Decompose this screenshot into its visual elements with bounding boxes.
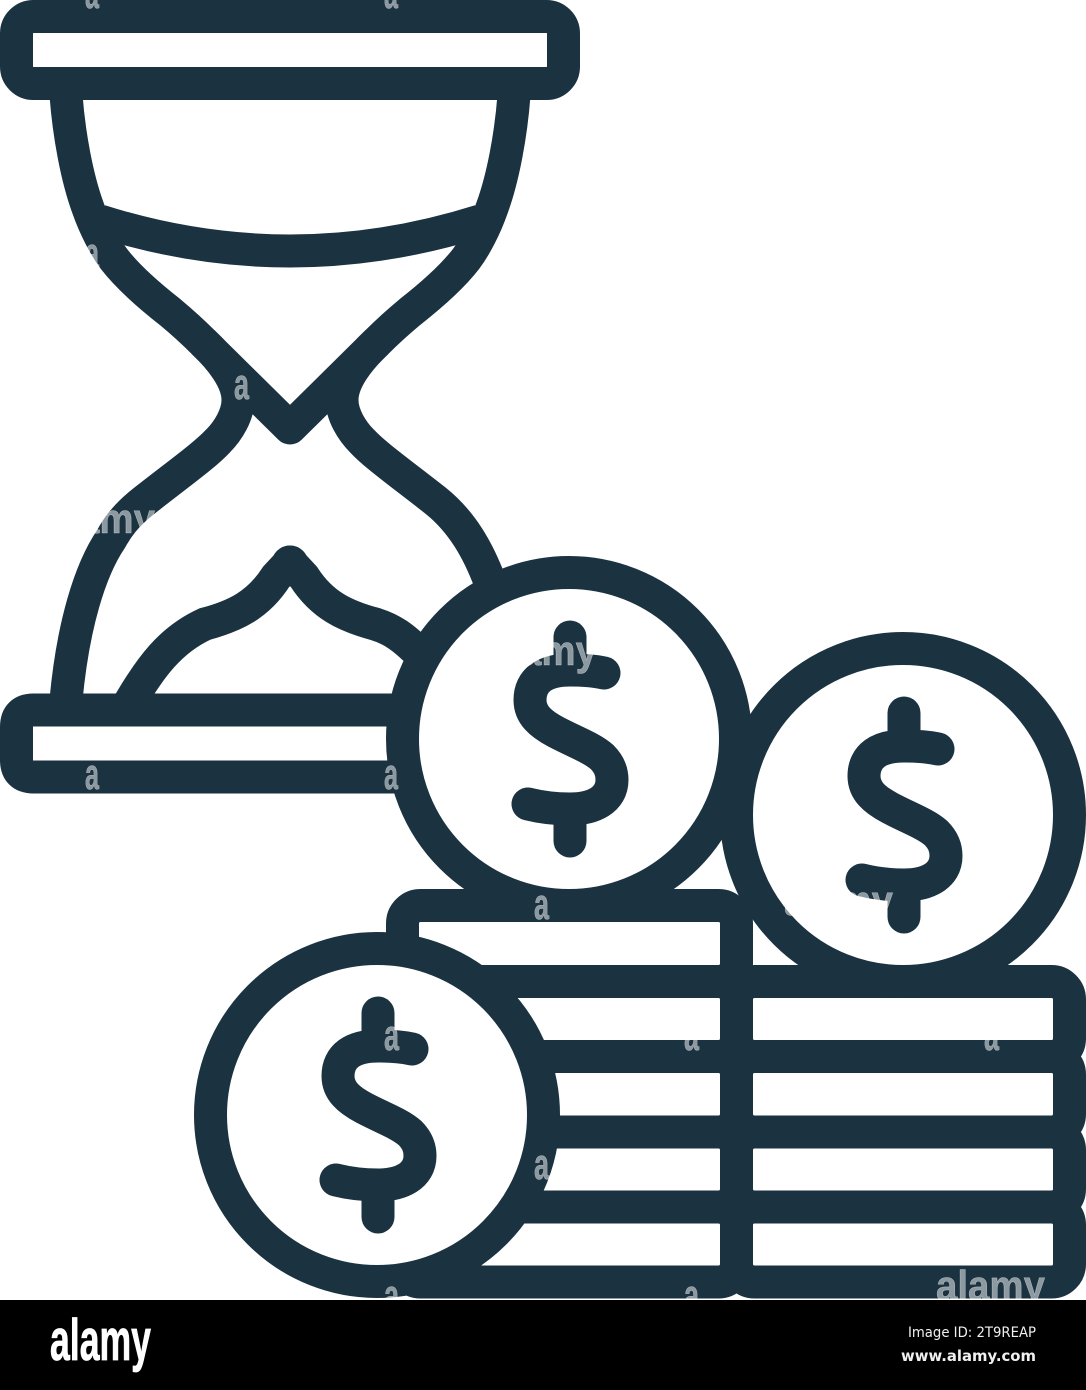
icon: hourglass (16, 16, 564, 777)
neck, left side (66, 342, 238, 700)
watermark fragments: alamy (936, 1262, 1046, 1309)
website: www.alamy.com (901, 1347, 1036, 1365)
mound peak (288, 562, 292, 566)
watermark fragments: a (534, 1140, 549, 1189)
watermark fragments: a (684, 1271, 699, 1320)
hourglass top cap (16, 16, 564, 84)
upper sand surface (100, 221, 480, 251)
footer logo: alamy (50, 1308, 151, 1373)
lower sand mound (130, 562, 418, 702)
watermark fragments: a (684, 1011, 699, 1060)
watermark fragments: alamy (784, 877, 894, 924)
watermark fragments: a (534, 880, 549, 929)
icon: right coin (736, 648, 1070, 982)
watermark fragments: alamy (488, 627, 598, 674)
watermark fragments: a (85, 229, 99, 278)
watermark fragments: a (384, 750, 398, 799)
watermark fragments: a (234, 360, 249, 409)
watermark fragments: a (384, 1271, 399, 1320)
watermark fragments: a (384, 1011, 399, 1060)
watermark fragments: alamy (46, 495, 156, 542)
watermark fragments: a (85, 750, 99, 799)
icon: top coin (402, 572, 736, 906)
hourglass bottom cap (16, 710, 400, 777)
icon: left coin stack (402, 906, 736, 1282)
icon: right coin stack (736, 982, 1070, 1282)
neck, right side (342, 342, 490, 582)
footer bar (0, 1300, 1086, 1390)
image id: Image ID: 2T9REAP (908, 1325, 1036, 1341)
icon: front coin (210, 948, 544, 1282)
upper bulb outline and sand funnel (66, 95, 514, 428)
watermark fragments: a (984, 1011, 999, 1060)
